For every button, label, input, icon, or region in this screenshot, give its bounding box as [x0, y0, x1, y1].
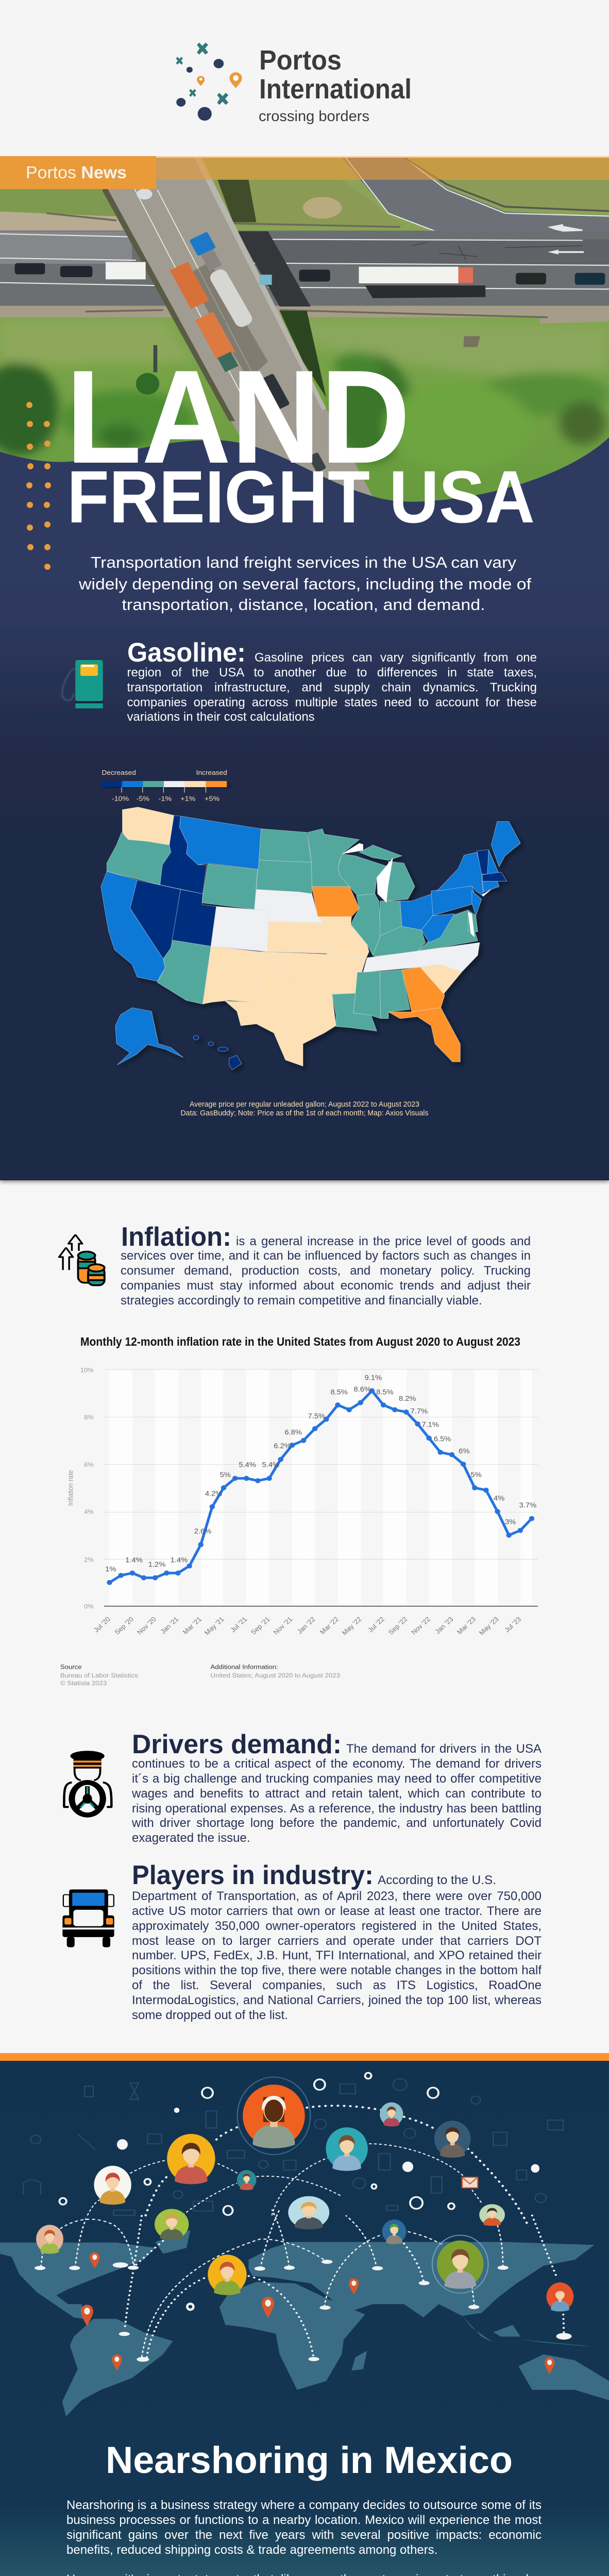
panel: drivers demand: with driver shortage long before the pandemic, and unfortunately Covid	[132, 1816, 542, 1830]
icon: envelope	[462, 2177, 478, 2188]
data labels: 5%	[471, 1471, 482, 1479]
data labels: 6.2%	[274, 1442, 291, 1450]
panel: drivers demand: continues to be a critical aspect of the economy. The demand for drivers	[132, 1757, 542, 1771]
x axis labels: Jul '23	[503, 1615, 523, 1634]
map legend	[101, 769, 227, 802]
chart source: Additional Information:	[211, 1663, 278, 1671]
photo: grass texture patches	[0, 320, 609, 470]
heading: Inflation:	[121, 1222, 231, 1252]
people avatars upper	[94, 2077, 471, 2205]
chart source: Source	[60, 1663, 82, 1671]
text block: nearshoring intro: significant gains over the next five years with several positive impacts: economic	[66, 2528, 542, 2542]
decorative dots	[26, 402, 51, 570]
panel: gasoline: region of the USA to another due to differences in state taxes,	[127, 666, 537, 680]
text block: According to the U.S.	[378, 1873, 496, 1887]
world map illustration	[0, 2073, 609, 2416]
panel: navy background section	[0, 531, 609, 1180]
faint background glyphs	[23, 2079, 563, 2215]
panel: gasoline: variations in their cost calculations	[127, 710, 315, 724]
map legend: -5%	[137, 794, 149, 802]
y axis labels: 2%	[84, 1556, 94, 1563]
panel: inflation: services over time, and it can be influenced by factors such as changes in	[121, 1249, 531, 1263]
chart source: Bureau of Labor Statistics	[60, 1671, 138, 1679]
panel: players in industry: approximately 350,000 owner-operators registered in the United States,	[132, 1919, 542, 1933]
map legend: Decreased	[102, 769, 136, 776]
x axis labels: May '21	[203, 1615, 226, 1637]
chart source	[60, 1663, 340, 1687]
intro text	[78, 553, 531, 614]
intro text: Transportation land freight services in the USA can vary	[91, 553, 517, 571]
data labels: 3.7%	[519, 1501, 537, 1510]
logo wordmark: crossing borders	[259, 108, 369, 125]
panel: drivers demand: wages and benefits to attract and retain talent, which can contribute to	[132, 1787, 542, 1801]
title: LAND FREIGHT USA: FREIGHT USA	[67, 455, 535, 538]
map note	[180, 1100, 429, 1117]
data labels	[105, 1374, 537, 1573]
y axis labels: 4%	[84, 1509, 94, 1516]
photo: overpass shadow	[237, 231, 311, 307]
panel: inflation: consumer demand, production costs, and monetary policy. Trucking	[121, 1264, 531, 1278]
map legend: +1%	[180, 794, 195, 802]
x axis labels: Jan '21	[159, 1615, 180, 1635]
data labels: 1%	[105, 1566, 116, 1573]
x axis labels: Sep '20	[113, 1615, 135, 1636]
panel: logo header	[0, 0, 609, 156]
data labels: 1.4%	[171, 1556, 188, 1565]
y axis labels: 0%	[84, 1603, 94, 1610]
panel: players in industry: some dropped out of the list.	[132, 2008, 288, 2022]
data labels: 5%	[220, 1471, 231, 1479]
orange divider	[0, 2053, 609, 2061]
continents	[0, 2230, 609, 2416]
wave shape	[0, 437, 609, 578]
photo: vehicles	[15, 189, 605, 473]
data labels: 8.5%	[376, 1388, 394, 1396]
data labels: 1.2%	[148, 1561, 166, 1569]
data labels: 2.6%	[194, 1528, 212, 1535]
panel: drivers demand	[63, 1730, 542, 1849]
text block: nearshoring intro: Nearshoring is a business strategy where a company decides to outsource some of its	[66, 2498, 542, 2512]
data labels: 6.8%	[284, 1429, 302, 1436]
text block: is a general increase in the price level of goods and	[236, 1234, 531, 1248]
banner: Portos News	[0, 156, 156, 189]
logo wordmark	[259, 45, 412, 125]
x axis labels: Jan '23	[433, 1615, 455, 1635]
data labels: 1.4%	[125, 1556, 143, 1565]
x axis labels: Jul '22	[366, 1615, 386, 1634]
x axis labels: Nov '21	[272, 1615, 294, 1636]
x axis labels: Jan '22	[295, 1615, 317, 1635]
heading: Nearshoring in Mexico: Nearshoring in Mexico	[106, 2439, 513, 2481]
chart title: Monthly 12-month inflation rate in the United States from August 2020 to August 2023	[80, 1335, 520, 1348]
logo wordmark: International	[259, 74, 412, 105]
data labels: 9.1%	[365, 1374, 382, 1382]
map legend: -10%	[112, 794, 129, 802]
panel: players in industry: Department of Transportation, as of April 2023, there were over 750,000	[132, 1889, 542, 1903]
panel: players in industry: IntermodaLogistics, and National Carriers, joined the top 100 list, whereas	[132, 1993, 542, 2007]
panel: gasoline price map	[101, 769, 520, 1117]
panel: players in industry: active US motor carriers that own or lease at least one tractor. There are	[132, 1904, 542, 1918]
panel: inflation: companies must stay informed about economic trends and adjust their	[121, 1279, 531, 1293]
rings and dots	[59, 2073, 539, 2215]
intro text: transportation, distance, location, and demand.	[122, 596, 485, 614]
x axis labels: Nov '22	[410, 1615, 432, 1636]
panel: nearshoring background	[0, 2061, 609, 2576]
map markers and lower avatars	[35, 2196, 573, 2375]
network arcs upper	[88, 2106, 528, 2226]
chart source: © Statista 2023	[60, 1680, 107, 1687]
x axis labels: Jul '20	[92, 1615, 112, 1634]
network arcs lower	[41, 2210, 564, 2359]
photo: overpass deck	[83, 158, 373, 497]
icon: driver	[63, 1751, 112, 1818]
map: US states	[101, 807, 520, 1070]
x axis labels: Nov '20	[136, 1615, 158, 1636]
banner: Portos News: Portos News	[26, 163, 127, 182]
data labels: 8.6%	[354, 1385, 371, 1394]
x axis labels: May '23	[478, 1615, 500, 1637]
data labels: 4%	[494, 1495, 505, 1503]
logo wordmark: Portos	[259, 45, 342, 76]
panel: drivers demand: rising operational expenses. As a reference, the industry has been battling	[132, 1802, 542, 1816]
y axis title: Inflation rate	[66, 1470, 75, 1506]
data labels: 7.5%	[308, 1412, 325, 1420]
map note: Average price per regular unleaded gallon; August 2022 to August 2023	[190, 1100, 419, 1109]
data labels: 5.4%	[262, 1461, 280, 1469]
data labels: 7.7%	[411, 1408, 428, 1416]
panel: gasoline: companies operating across multiple states need to account for these	[127, 696, 537, 709]
chart source: United States; August 2020 to August 2023	[211, 1671, 340, 1679]
panel: players in industry: number. UPS, FedEx, J.B. Hunt, TFI International, and XPO retained their	[132, 1948, 542, 1962]
title: LAND FREIGHT USA	[66, 342, 535, 538]
panel: players in industry	[62, 1860, 542, 2026]
y axis labels	[80, 1367, 94, 1610]
text block: nearshoring intro: benefits, reduced shipping costs & trade agreements among others.	[66, 2543, 437, 2557]
map legend: +5%	[205, 794, 219, 802]
data labels: 4.2%	[205, 1490, 223, 1498]
x axis labels: Mar '22	[318, 1615, 340, 1636]
title: LAND FREIGHT USA: LAND	[66, 342, 410, 491]
intro text: widely depending on several factors, including the mode of	[78, 575, 531, 593]
icon: truck	[62, 1889, 114, 1947]
map note: Data: GasBuddy; Note: Price as of the 1st of each month; Map: Axios Visuals	[180, 1109, 429, 1117]
y axis labels: 10%	[80, 1367, 94, 1374]
panel: players in industry: most lease on to larger carriers and operate under that carriers DOT	[132, 1934, 542, 1948]
panel: gasoline	[62, 638, 537, 727]
panel: drivers demand: it´s a big challenge and trucking companies may need to offer competitive	[132, 1772, 542, 1786]
map legend: Increased	[196, 769, 227, 776]
panel: inflation: strategies accordingly to remain competitive and financially viable.	[121, 1294, 482, 1308]
panel: inflation	[59, 1222, 531, 1311]
x axis labels: Sep '22	[386, 1615, 409, 1636]
panel: players in industry: of the list. Several companies, such as ITS Logistics, RoadOne	[132, 1978, 542, 1992]
data labels: 8.5%	[330, 1388, 348, 1396]
x axis labels: Jul '21	[229, 1615, 248, 1634]
y axis labels: 8%	[84, 1414, 94, 1421]
heading: Drivers demand:	[132, 1730, 342, 1759]
panel: players in industry: positions within the top five, there were notable changes in the bottom half	[132, 1963, 542, 1977]
x axis labels: Mar '23	[455, 1615, 477, 1636]
hero photo: highway interchange	[0, 158, 609, 531]
x axis labels: Mar '21	[181, 1615, 203, 1636]
heading: Gasoline:	[127, 638, 246, 668]
icon: arrows and coins	[59, 1234, 105, 1285]
data labels: 5.4%	[239, 1461, 256, 1469]
line series	[110, 1391, 532, 1583]
data labels: 6%	[459, 1447, 470, 1455]
translucent orange band	[156, 158, 609, 180]
text block: nearshoring intro	[66, 2498, 542, 2576]
icon: fuel pump	[62, 660, 103, 708]
map legend: -1%	[159, 794, 172, 802]
data labels: 8.2%	[399, 1395, 416, 1403]
data labels: 6.5%	[434, 1435, 451, 1444]
x axis labels: Sep '21	[249, 1615, 272, 1636]
logo mark	[176, 43, 242, 121]
heading: Players in industry:	[132, 1860, 374, 1890]
x axis labels	[92, 1615, 523, 1637]
panel: gasoline: transportation infrastructure, and supply chain dynamics. Trucking	[127, 681, 537, 694]
text block: Gasoline prices can vary significantly from one	[255, 651, 537, 665]
text block: nearshoring intro: business processes or functions to a nearby location. Mexico will experience the most	[66, 2513, 542, 2527]
text block: The demand for drivers in the USA	[346, 1742, 542, 1756]
x axis labels: May '22	[340, 1615, 363, 1637]
data labels: 7.1%	[421, 1421, 439, 1429]
panel: inflation line chart	[60, 1335, 538, 1687]
panel: drivers demand: exagerated the issue.	[132, 1831, 250, 1845]
y axis labels: 6%	[84, 1461, 94, 1468]
data labels: 3%	[505, 1518, 516, 1526]
